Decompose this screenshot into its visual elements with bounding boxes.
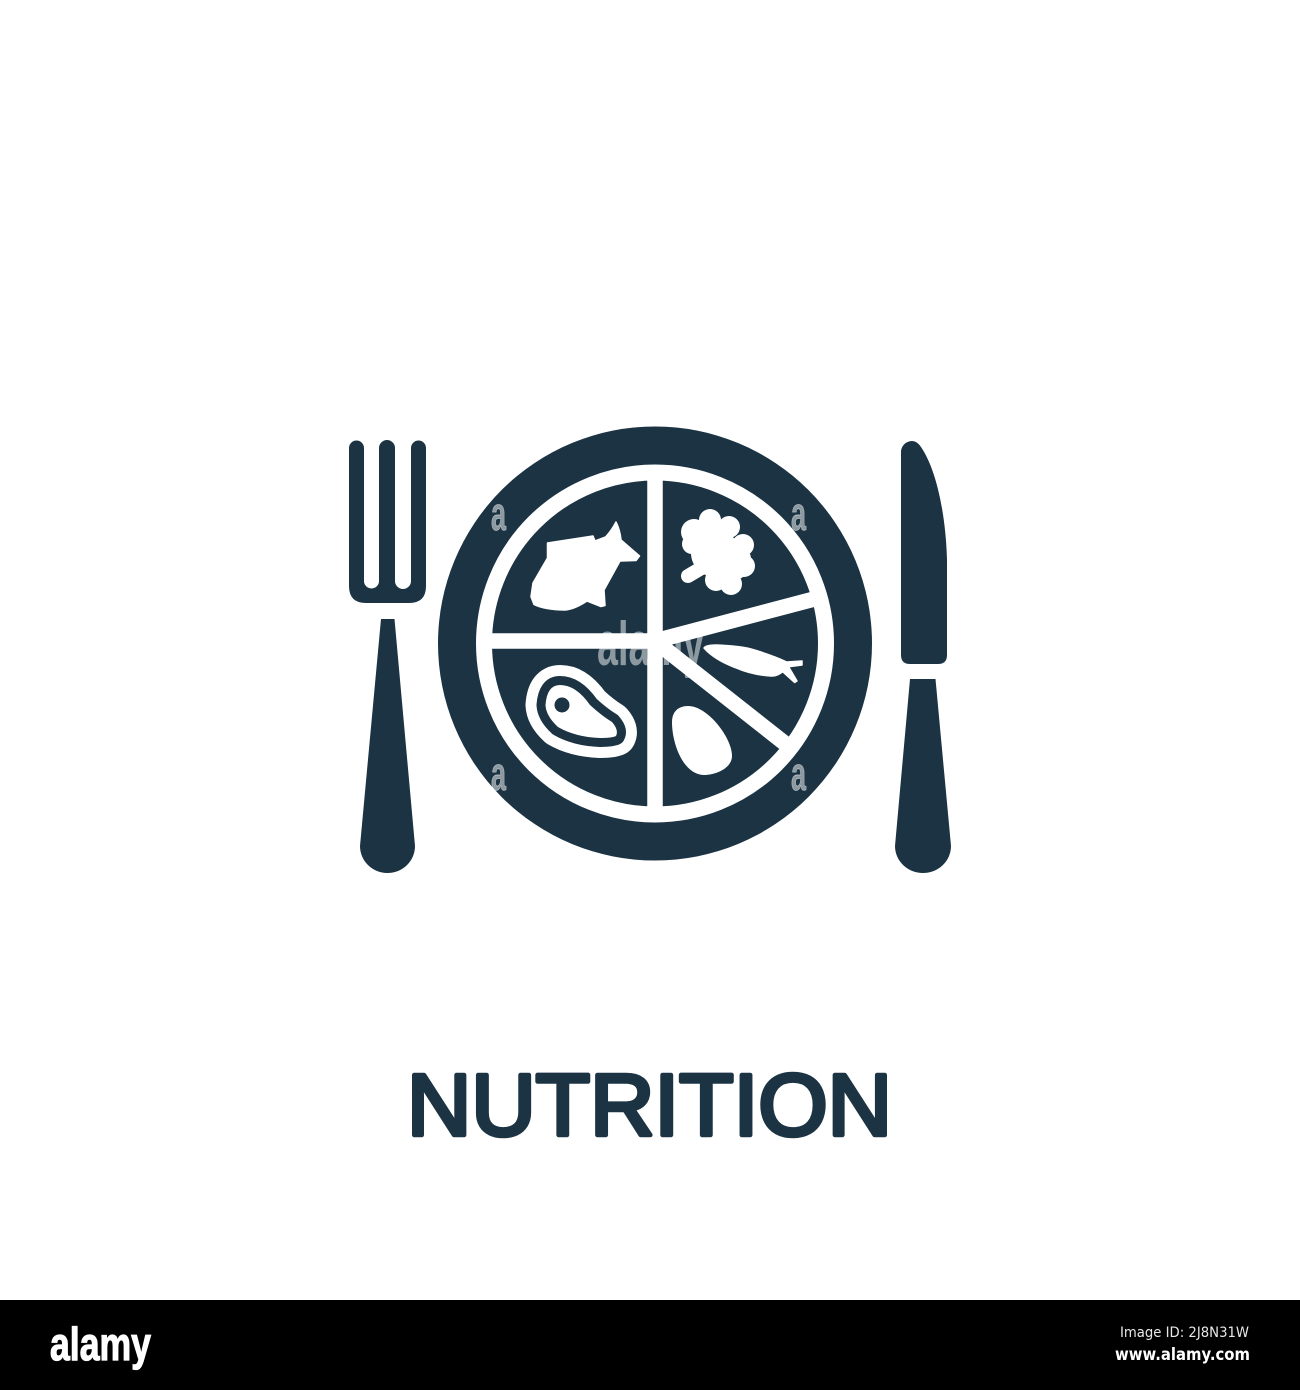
image id: Image ID: 2J8N31W bbox=[1120, 1325, 1249, 1341]
icon: steak bbox=[546, 685, 617, 738]
website: www.alamy.com bbox=[1115, 1345, 1250, 1365]
watermark: center word: alamy bbox=[597, 610, 704, 679]
watermark: corner letters: a bbox=[791, 747, 806, 800]
plate inner ring bbox=[484, 472, 826, 814]
icon: broccoli bbox=[681, 509, 755, 595]
title: NUTRITION bbox=[407, 1057, 892, 1154]
footer logo: alamy bbox=[50, 1318, 151, 1370]
watermark: corner letters: a bbox=[491, 487, 506, 540]
icon: knife bbox=[895, 441, 951, 873]
watermark: corner letters bbox=[491, 487, 806, 800]
icon: egg bbox=[672, 706, 732, 775]
plate dividers bbox=[485, 470, 818, 817]
watermark: corner letters: a bbox=[791, 487, 806, 540]
plate rim bbox=[438, 426, 872, 860]
icon: shrimp bbox=[704, 645, 802, 682]
icon: fish bbox=[531, 522, 640, 610]
icon: plate with food sections bbox=[438, 426, 872, 860]
watermark: corner letters: a bbox=[491, 747, 506, 800]
icon: fork bbox=[349, 440, 426, 873]
footer bar bbox=[0, 1300, 1300, 1390]
